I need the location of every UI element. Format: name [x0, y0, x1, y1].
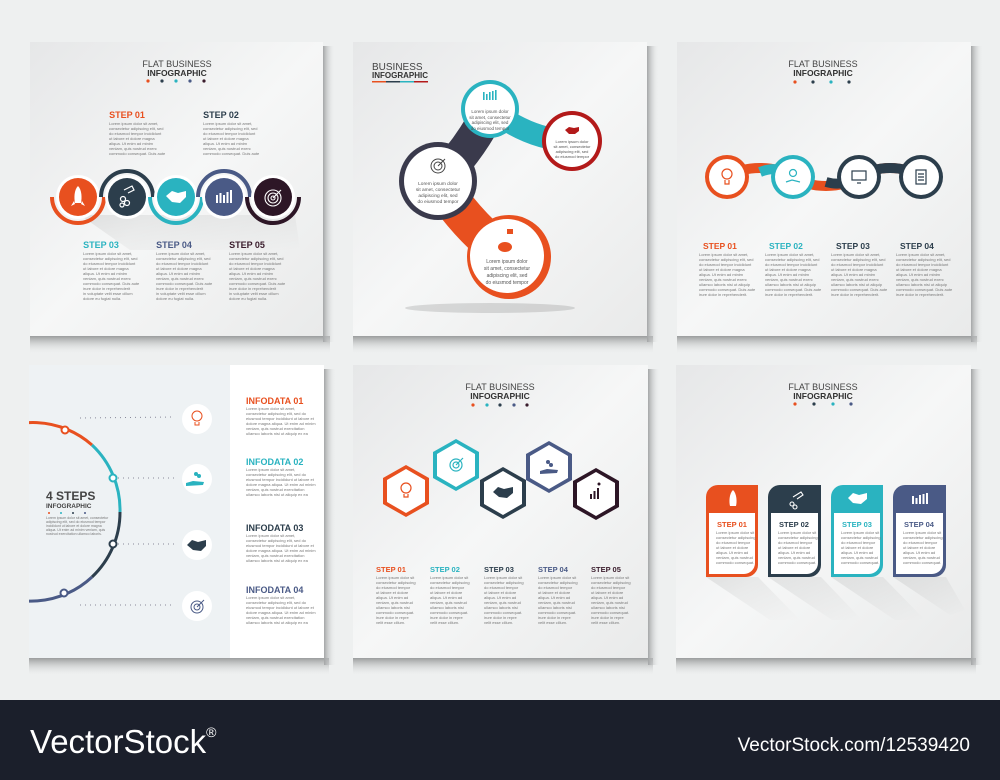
- step columns: aliqua. Ut enim ad minim: [896, 272, 941, 277]
- panel shadows: [29, 46, 983, 676]
- infodata list: INFODATA 03: [246, 523, 303, 533]
- footer bar: watermark: VectorStock: [30, 723, 206, 760]
- cards: ut labore et dolore: [841, 545, 874, 550]
- footer bar: watermark: [0, 700, 1000, 780]
- step columns: STEP 04: [900, 241, 934, 251]
- circle: target dark: do eiusmod tempor: [417, 199, 459, 205]
- infodata list: veniam, quis nostrud exercitation: [246, 426, 304, 431]
- circle: target dark: [399, 142, 477, 220]
- step columns: consectetur adipiscing elit, sed: [831, 257, 885, 262]
- step columns: Lorem ipsum dolor sit: [591, 575, 630, 580]
- step columns: consectetur adipiscing elit, sed: [765, 257, 819, 262]
- step columns: commodo consequat. Duis aute: [765, 287, 822, 292]
- icon: money hand: [786, 170, 800, 182]
- step columns: consectetur adipiscing elit, sed: [699, 257, 753, 262]
- step columns: aliqua. Ut enim ad minim: [699, 272, 744, 277]
- title: 4 steps infographic: 4 STEPS: [46, 489, 95, 503]
- step columns: velit esse cillum.: [376, 620, 405, 625]
- heading: flat business infographic: [142, 59, 212, 83]
- step columns: STEP 05: [591, 565, 621, 574]
- step columns: veniam, quis nostrud exerc: [896, 277, 944, 282]
- step 05 text: STEP 05: [229, 240, 265, 250]
- cards: aliqua. Ut enim ad: [778, 550, 810, 555]
- step columns: Lorem ipsum dolor sit amet,: [896, 252, 945, 257]
- step columns: Lorem ipsum dolor sit: [484, 575, 523, 580]
- circle: target dark: Lorem ipsum dolor: [418, 181, 458, 187]
- cards: veniam, quis nostrud: [903, 555, 940, 560]
- heading: flat business infographic: [788, 59, 858, 84]
- step columns: do eiusmod tempor incididunt: [831, 262, 884, 267]
- panel: hexagon steps: [353, 365, 648, 658]
- step columns: ut labore et dolore magna: [699, 267, 745, 272]
- circle: piggy orange: sit amet, consectetur: [484, 266, 530, 272]
- step columns: irure dolor in reprehenderit.: [896, 292, 944, 297]
- step 04 text: commodo consequat. Duis aute: [156, 281, 213, 286]
- step 03 text: aliqua. Ut enim ad minim: [83, 271, 128, 276]
- step 04 text: [156, 240, 213, 301]
- step columns: do eiusmod tempor incididunt: [765, 262, 818, 267]
- step columns: Lorem ipsum dolor sit: [376, 575, 415, 580]
- heading: business infographic: BUSINESS: [372, 62, 423, 73]
- step columns: veniam, quis nostrud: [376, 600, 413, 605]
- step 01 text: aliqua. Ut enim ad minim: [109, 141, 154, 146]
- icon: rocket: [71, 186, 85, 206]
- infodata list: eiusmod tempor incididunt ut labore et: [246, 416, 315, 421]
- heading: business infographic: INFOGRAPHIC: [372, 71, 428, 80]
- infodata list: ullamco laboris nisi ut aliquip ex ea: [246, 431, 309, 436]
- circle: piggy orange: do eiusmod tempor: [486, 280, 529, 286]
- step 03 text: in voluptate velit esse cillum: [83, 291, 133, 296]
- step 04 text: dolore eu fugiat nulla.: [156, 296, 194, 301]
- step columns: velit esse cillum.: [484, 620, 513, 625]
- step columns: aliqua. Ut enim ad minim: [831, 272, 876, 277]
- step columns: STEP 01: [376, 565, 406, 574]
- step columns: consectetur adipiscing: [538, 580, 578, 585]
- step columns: irure dolor in repre: [538, 615, 571, 620]
- step 01 text: Lorem ipsum dolor sit amet,: [109, 121, 158, 126]
- circle: handshake red: [542, 111, 602, 171]
- step columns: ullamco laboris nisi ut aliquip: [765, 282, 817, 287]
- step 05 text: do eiusmod tempor incididunt: [229, 261, 282, 266]
- step columns: velit esse cillum.: [430, 620, 459, 625]
- title: 4 steps infographic: Lorem ipsum dolor sit amet, consectetur: [46, 516, 109, 520]
- infodata list: dolore magna aliqua. Ut enim ad minim: [246, 421, 316, 426]
- step 02 text: veniam, quis nostrud exerc: [203, 146, 251, 151]
- step columns: ullamco laboris nisi: [430, 605, 464, 610]
- step columns: ut labore et dolore magna: [896, 267, 942, 272]
- circle: target dark: adipiscing elit, sed: [418, 193, 458, 199]
- step 03 text: dolore eu fugiat nulla.: [83, 296, 121, 301]
- step columns: aliqua. Ut enim ad: [484, 595, 516, 600]
- step columns: ullamco laboris nisi ut aliquip: [896, 282, 948, 287]
- circle: piggy orange: [467, 215, 551, 299]
- infodata list: veniam, quis nostrud exercitation: [246, 487, 304, 492]
- cards: Lorem ipsum dolor sit: [778, 530, 817, 535]
- cards: STEP 04: [904, 520, 935, 529]
- infodata list: INFODATA 02: [246, 457, 303, 467]
- step columns: ut labore et dolore: [591, 590, 624, 595]
- panel: card steps: [676, 365, 971, 658]
- circles row: [52, 171, 300, 250]
- step columns: ullamco laboris nisi: [591, 605, 625, 610]
- hexagons: [383, 439, 619, 520]
- step columns: STEP 03: [484, 565, 514, 574]
- title: 4 steps infographic: aliqua. Ut enim ad minim veniam, quis: [46, 528, 105, 532]
- step 03 text: veniam, quis nostrud exerc: [83, 276, 131, 281]
- step columns: veniam, quis nostrud: [538, 600, 575, 605]
- heading: flat business infographic: INFOGRAPHIC: [470, 391, 530, 401]
- step columns: irure dolor in reprehenderit.: [831, 292, 879, 297]
- step columns: aliqua. Ut enim ad minim: [765, 272, 810, 277]
- step columns: commodo consequat. Duis aute: [896, 287, 953, 292]
- step 02 text: do eiusmod tempor incididunt: [203, 131, 256, 136]
- cards: consectetur adipiscing: [841, 535, 881, 540]
- step columns: irure dolor in reprehenderit.: [765, 292, 813, 297]
- step 04 text: veniam, quis nostrud exerc: [156, 276, 204, 281]
- step columns: do eiusmod tempor: [484, 585, 519, 590]
- step 05 text: dolore eu fugiat nulla.: [229, 296, 267, 301]
- step columns: consectetur adipiscing: [484, 580, 524, 585]
- cards: STEP 02: [779, 520, 809, 529]
- step 04 text: do eiusmod tempor incididunt: [156, 261, 209, 266]
- step 02 text: ut labore et dolore magna: [203, 136, 249, 141]
- cards: aliqua. Ut enim ad: [716, 550, 748, 555]
- heading: flat business infographic: FLAT BUSINESS: [465, 382, 535, 392]
- cards: do eiusmod tempor: [778, 540, 813, 545]
- circle: piggy orange: Lorem ipsum dolor: [486, 259, 528, 265]
- cards: do eiusmod tempor: [716, 540, 751, 545]
- infodata list: Lorem ipsum dolor sit amet,: [246, 533, 295, 538]
- step 02 text: Lorem ipsum dolor sit amet,: [203, 121, 252, 126]
- step columns: ut labore et dolore: [484, 590, 517, 595]
- step columns: veniam, quis nostrud: [430, 600, 467, 605]
- step columns: consectetur adipiscing: [376, 580, 416, 585]
- step 04 text: Lorem ipsum dolor sit amet,: [156, 251, 205, 256]
- infodata list: INFODATA 01: [246, 396, 303, 406]
- step 03 text: STEP 03: [83, 240, 119, 250]
- step columns: commodo consequat.: [484, 610, 522, 615]
- step columns: Lorem ipsum dolor sit amet,: [831, 252, 880, 257]
- step 01 text: ut labore et dolore magna: [109, 136, 155, 141]
- circle: piggy orange: adipiscing elit, sed: [487, 273, 528, 279]
- step 01 text: [109, 110, 166, 156]
- heading: business infographic: [372, 62, 428, 82]
- floor shadow: [405, 303, 575, 313]
- cards: consectetur adipiscing: [778, 535, 818, 540]
- step columns: Lorem ipsum dolor sit: [538, 575, 577, 580]
- step 02 text: [203, 110, 260, 156]
- step 04 text: aliqua. Ut enim ad minim: [156, 271, 201, 276]
- title: 4 steps infographic: adipiscing elit, sed do eiusmod tempor: [46, 520, 106, 524]
- step columns: commodo consequat. Duis aute: [699, 287, 756, 292]
- step columns: ut labore et dolore magna: [831, 267, 877, 272]
- step columns: [699, 241, 953, 297]
- step 05 text: in voluptate velit esse cillum: [229, 291, 279, 296]
- icon: target: [265, 190, 281, 206]
- step 05 text: irure dolor in reprehenderit: [229, 286, 277, 291]
- icon: bulb: [722, 169, 732, 184]
- step 05 text: veniam, quis nostrud exerc: [229, 276, 277, 281]
- step columns: ullamco laboris nisi ut aliquip: [831, 282, 883, 287]
- heading: flat business infographic: INFOGRAPHIC: [793, 68, 853, 78]
- step 04 text: consectetur adipiscing elit, sed: [156, 256, 210, 261]
- infodata list: dolore magna aliqua. Ut enim ad minim: [246, 482, 316, 487]
- infodata list: eiusmod tempor incididunt ut labore et: [246, 543, 315, 548]
- arc: [29, 421, 122, 603]
- infodata list: consectetur adipiscing elit, sed do: [246, 538, 307, 543]
- infodata list: ullamco laboris nisi ut aliquip ex ea: [246, 620, 309, 625]
- step 05 text: [229, 240, 286, 301]
- icon: handshake: [166, 191, 186, 203]
- cards: do eiusmod tempor: [841, 540, 876, 545]
- cards: veniam, quis nostrud: [778, 555, 815, 560]
- cards: [706, 485, 965, 620]
- step 02 text: commodo consequat. Duis aute: [203, 151, 260, 156]
- panel: business infographic metaball: [353, 42, 647, 336]
- infodata list: Lorem ipsum dolor sit amet,: [246, 467, 295, 472]
- step columns: consectetur adipiscing elit, sed: [896, 257, 950, 262]
- step columns: aliqua. Ut enim ad: [376, 595, 408, 600]
- step 01 text: STEP 01: [109, 110, 145, 120]
- connectors: [438, 109, 572, 257]
- step columns: velit esse cillum.: [538, 620, 567, 625]
- cards: STEP 03: [842, 520, 872, 529]
- cards: commodo consequat.: [841, 560, 879, 565]
- step 03 text: [83, 240, 140, 301]
- card labels: STEP 01: [717, 520, 747, 529]
- cards: consectetur adipiscing: [903, 535, 943, 540]
- circle: chart teal: sit amet, consectetur: [469, 115, 511, 120]
- cards: veniam, quis nostrud: [841, 555, 878, 560]
- step columns: veniam, quis nostrud exerc: [699, 277, 747, 282]
- cards: ut labore et dolore: [778, 545, 811, 550]
- step 05 text: aliqua. Ut enim ad minim: [229, 271, 274, 276]
- step 05 text: Lorem ipsum dolor sit amet,: [229, 251, 278, 256]
- step columns: ut labore et dolore: [430, 590, 463, 595]
- step 05 text: consectetur adipiscing elit, sed: [229, 256, 283, 261]
- step columns: irure dolor in repre: [484, 615, 517, 620]
- step columns: STEP 03: [836, 241, 870, 251]
- infodata list: ullamco laboris nisi ut aliquip ex ea: [246, 558, 309, 563]
- step columns: ullamco laboris nisi ut aliquip: [699, 282, 751, 287]
- step 04 text: STEP 04: [156, 240, 192, 250]
- step columns: ullamco laboris nisi: [484, 605, 518, 610]
- step 01 text: veniam, quis nostrud exerc: [109, 146, 157, 151]
- heading: flat business infographic: INFOGRAPHIC: [147, 68, 207, 78]
- infodata list: consectetur adipiscing elit, sed do: [246, 472, 307, 477]
- step 04 text: ut labore et dolore magna: [156, 266, 202, 271]
- circle: chart teal: do eiusmod tempor: [471, 126, 510, 131]
- step 05 text: commodo consequat. Duis aute: [229, 281, 286, 286]
- cards: commodo consequat.: [903, 560, 941, 565]
- icon: notebook: [916, 170, 926, 184]
- step columns: ut labore et dolore: [376, 590, 409, 595]
- title: 4 steps infographic: INFOGRAPHIC: [46, 503, 92, 510]
- panel: five steps circles: [30, 42, 323, 336]
- step columns: STEP 01: [703, 241, 737, 251]
- cards: veniam, quis nostrud: [716, 555, 753, 560]
- circle: chart teal: [461, 80, 519, 138]
- step columns: veniam, quis nostrud: [484, 600, 521, 605]
- step 03 text: ut labore et dolore magna: [83, 266, 129, 271]
- step columns: commodo consequat.: [538, 610, 576, 615]
- infodata list: dolore magna aliqua. Ut enim ad minim: [246, 610, 316, 615]
- step 04 text: irure dolor in reprehenderit: [156, 286, 204, 291]
- heading: flat business infographic: FLAT BUSINESS: [788, 382, 858, 392]
- infodata list: [246, 396, 316, 625]
- step columns: do eiusmod tempor: [376, 585, 411, 590]
- step columns: aliqua. Ut enim ad: [538, 595, 570, 600]
- step columns: veniam, quis nostrud: [591, 600, 628, 605]
- infodata list: INFODATA 04: [246, 585, 303, 595]
- cards: consectetur adipiscing: [716, 535, 756, 540]
- cards: Lorem ipsum dolor sit: [841, 530, 880, 535]
- circle: handshake red: sit amet, consectetur: [554, 144, 591, 149]
- icon: monitor: [852, 171, 866, 183]
- footer bar: watermark: VectorStock.com/12539420: [738, 735, 970, 756]
- icon: chart: [216, 190, 232, 203]
- icons: [729, 490, 737, 506]
- step 03 text: commodo consequat. Duis aute: [83, 281, 140, 286]
- step columns: consectetur adipiscing: [430, 580, 470, 585]
- infodata list: consectetur adipiscing elit, sed do: [246, 600, 307, 605]
- step columns: aliqua. Ut enim ad: [591, 595, 623, 600]
- circle: target dark: sit amet, consectetur: [416, 187, 461, 193]
- step columns: do eiusmod tempor incididunt: [699, 262, 752, 267]
- cards: commodo consequat.: [778, 560, 816, 565]
- step columns: Lorem ipsum dolor sit: [430, 575, 469, 580]
- cards: ut labore et dolore: [903, 545, 936, 550]
- cards: Lorem ipsum dolor sit: [903, 530, 942, 535]
- icon: hand coins: [120, 186, 134, 207]
- infodata list: dolore magna aliqua. Ut enim ad minim: [246, 548, 316, 553]
- step 01 text: consectetur adipiscing elit, sed: [109, 126, 163, 131]
- step columns: veniam, quis nostrud exerc: [765, 277, 813, 282]
- heading: flat business infographic: INFOGRAPHIC: [793, 391, 853, 401]
- title: 4 steps infographic: nostrud exercitation ullamco laboris.: [46, 532, 102, 536]
- step columns: do eiusmod tempor: [430, 585, 465, 590]
- heading: flat business infographic: FLAT BUSINESS: [788, 59, 858, 69]
- step columns: velit esse cillum.: [591, 620, 620, 625]
- step 02 text: STEP 02: [203, 110, 239, 120]
- step columns: ullamco laboris nisi: [538, 605, 572, 610]
- infodata list: veniam, quis nostrud exercitation: [246, 553, 304, 558]
- infodata list: veniam, quis nostrud exercitation: [246, 615, 304, 620]
- step 04 text: in voluptate velit esse cillum: [156, 291, 206, 296]
- step 01 text: do eiusmod tempor incididunt: [109, 131, 162, 136]
- step columns: Lorem ipsum dolor sit amet,: [699, 252, 748, 257]
- dotted connectors: [80, 417, 175, 605]
- infodata list: Lorem ipsum dolor sit amet,: [246, 406, 295, 411]
- step columns: aliqua. Ut enim ad: [430, 595, 462, 600]
- title: 4 steps infographic: [46, 489, 109, 536]
- circle: handshake red: Lorem ipsum dolor: [555, 139, 589, 144]
- infodata list: consectetur adipiscing elit, sed do: [246, 411, 307, 416]
- infodata list: ullamco laboris nisi ut aliquip ex ea: [246, 492, 309, 497]
- step columns: commodo consequat.: [430, 610, 468, 615]
- step columns: veniam, quis nostrud exerc: [831, 277, 879, 282]
- cards: Lorem ipsum dolor sit: [716, 530, 755, 535]
- infodata list: eiusmod tempor incididunt ut labore et: [246, 477, 315, 482]
- step columns: consectetur adipiscing: [591, 580, 631, 585]
- step columns: Lorem ipsum dolor sit amet,: [765, 252, 814, 257]
- cards: aliqua. Ut enim ad: [841, 550, 873, 555]
- title: 4 steps infographic: incididunt ut labore et dolore magna: [46, 524, 102, 528]
- step 03 text: irure dolor in reprehenderit: [83, 286, 131, 291]
- step columns: commodo consequat.: [591, 610, 629, 615]
- step 03 text: do eiusmod tempor incididunt: [83, 261, 136, 266]
- step columns: irure dolor in repre: [591, 615, 624, 620]
- icon circles: [182, 404, 212, 621]
- step columns: ut labore et dolore magna: [765, 267, 811, 272]
- step columns: do eiusmod tempor: [538, 585, 573, 590]
- cards: aliqua. Ut enim ad: [903, 550, 935, 555]
- step columns: STEP 04: [538, 565, 569, 574]
- step columns: STEP 02: [769, 241, 803, 251]
- cards: ut labore et dolore: [716, 545, 749, 550]
- panel: four steps chain: [677, 42, 971, 336]
- step 03 text: Lorem ipsum dolor sit amet,: [83, 251, 132, 256]
- step columns: do eiusmod tempor incididunt: [896, 262, 949, 267]
- step columns: irure dolor in repre: [430, 615, 463, 620]
- step 02 text: aliqua. Ut enim ad minim: [203, 141, 248, 146]
- chain circles: [705, 155, 943, 199]
- step columns: commodo consequat.: [376, 610, 414, 615]
- step columns: commodo consequat. Duis aute: [831, 287, 888, 292]
- circle: chart teal: adipiscing elit, sed: [472, 120, 509, 125]
- cards: do eiusmod tempor: [903, 540, 938, 545]
- circle: chart teal: Lorem ipsum dolor: [471, 109, 509, 114]
- step 02 text: consectetur adipiscing elit, sed: [203, 126, 257, 131]
- heading: flat business infographic: FLAT BUSINESS: [142, 59, 212, 69]
- step columns: STEP 02: [430, 565, 460, 574]
- heading: flat business infographic: [788, 382, 858, 406]
- step columns: ut labore et dolore: [538, 590, 571, 595]
- step columns: irure dolor in repre: [376, 615, 409, 620]
- footer bar: watermark: ®: [206, 724, 217, 740]
- step columns: irure dolor in reprehenderit.: [699, 292, 747, 297]
- step 03 text: consectetur adipiscing elit, sed: [83, 256, 137, 261]
- step 05 text: ut labore et dolore magna: [229, 266, 275, 271]
- panel: 4 steps arc with infodata: [0, 365, 324, 658]
- circle: handshake red: adipiscing elit, sed: [556, 149, 588, 154]
- step columns: [376, 565, 631, 625]
- step columns: ullamco laboris nisi: [376, 605, 410, 610]
- circle: handshake red: do eiusmod tempor: [555, 154, 590, 159]
- step 01 text: commodo consequat. Duis aute: [109, 151, 166, 156]
- heading: flat business infographic: [465, 382, 535, 407]
- cards: commodo consequat.: [716, 560, 754, 565]
- icons: [401, 483, 411, 497]
- infodata list: eiusmod tempor incididunt ut labore et: [246, 605, 315, 610]
- step columns: do eiusmod tempor: [591, 585, 626, 590]
- infodata list: Lorem ipsum dolor sit amet,: [246, 595, 295, 600]
